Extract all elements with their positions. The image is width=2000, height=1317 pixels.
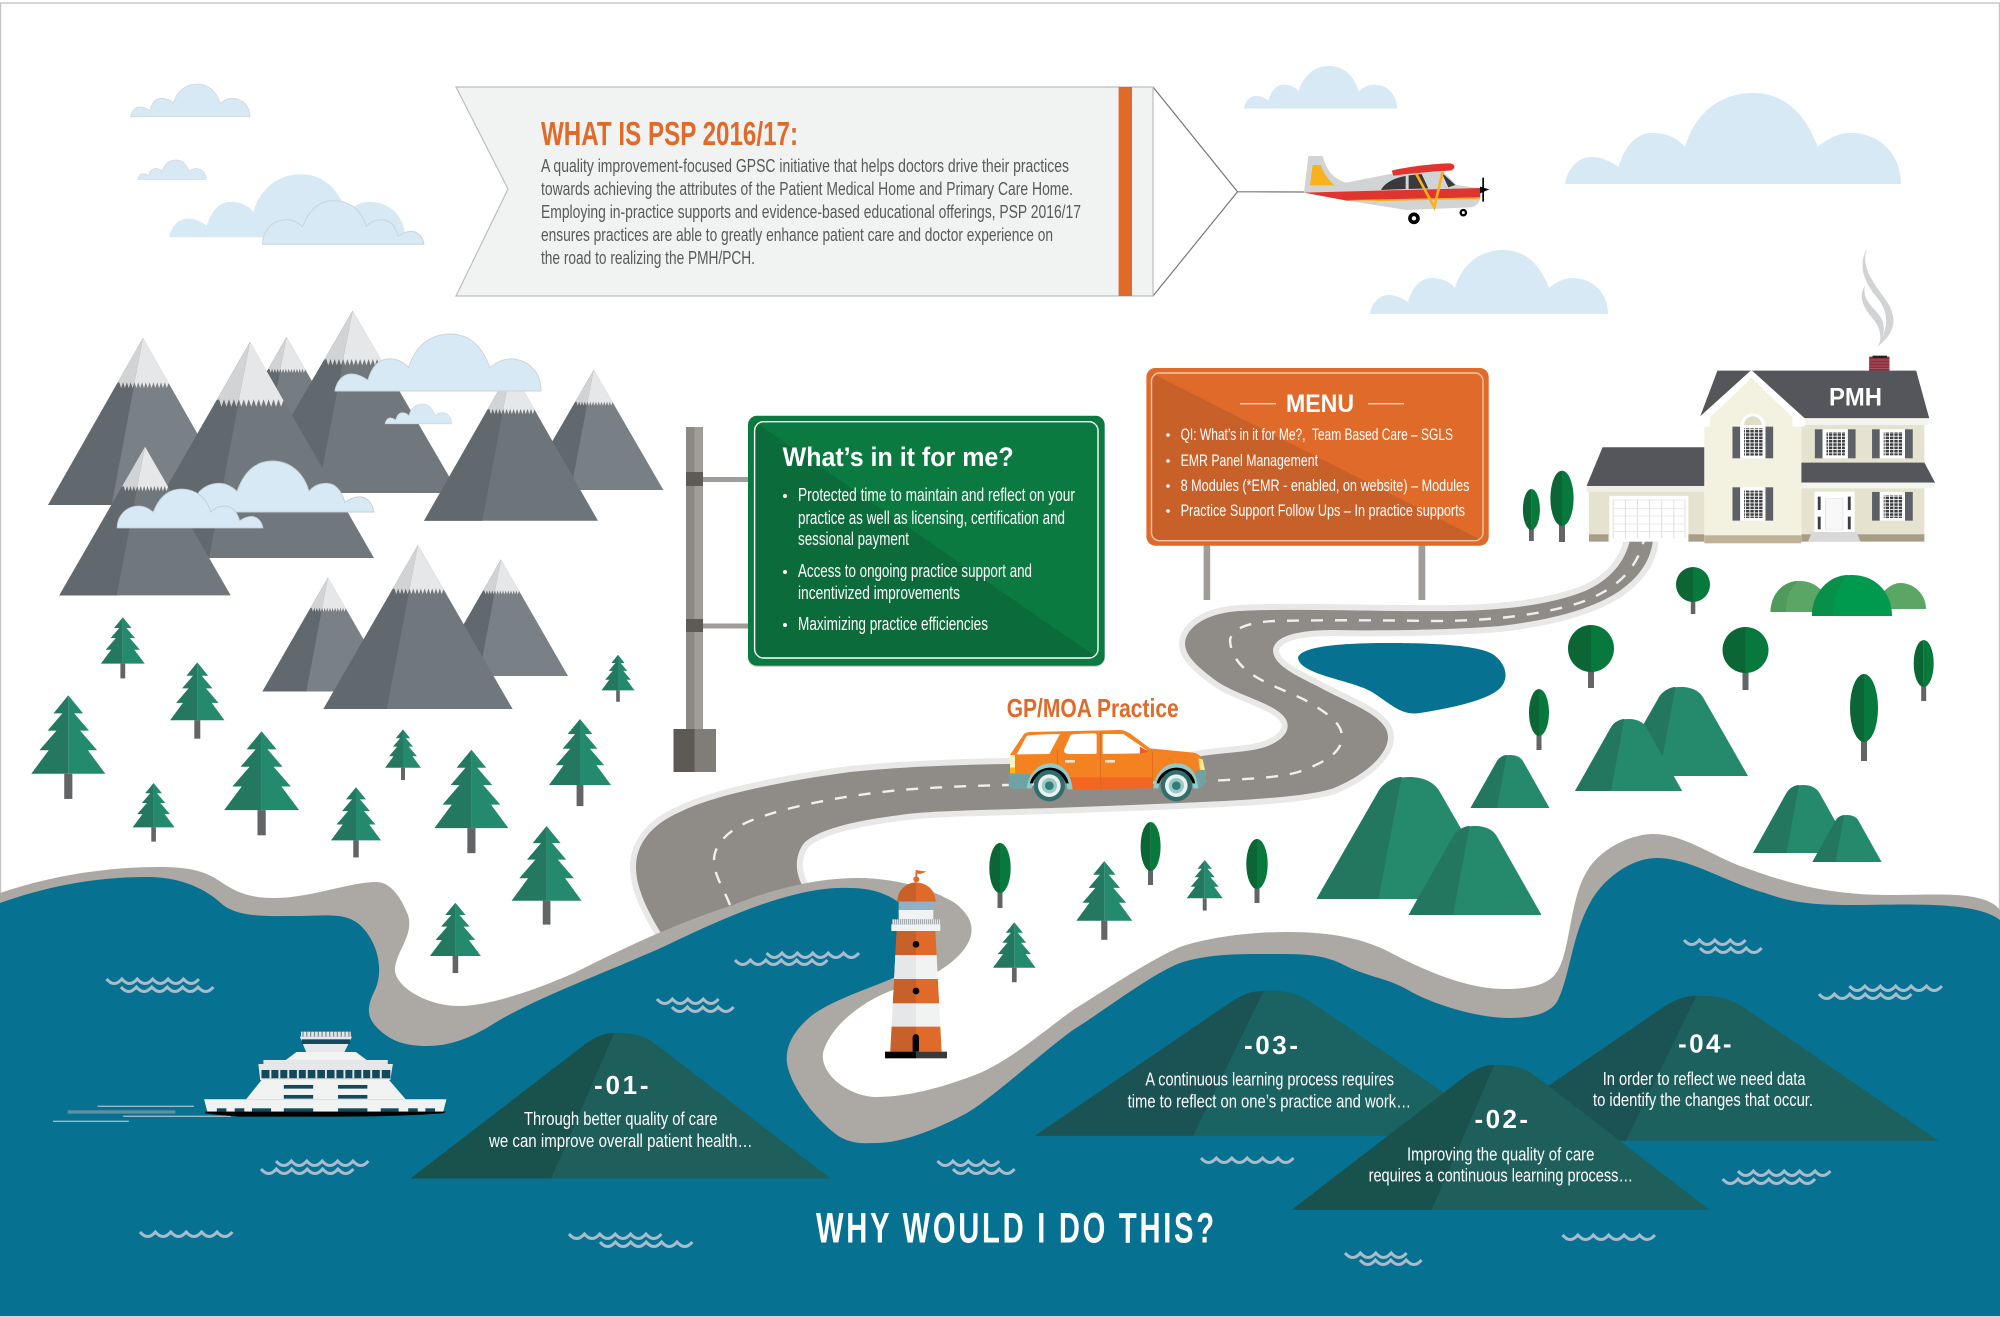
banner body text: Employing in-practice supports and evidence-based educational offerings, PSP 2016/17 — [541, 202, 1081, 222]
sign bullet list: Access to ongoing practice support and — [798, 561, 1032, 581]
icon: orange car — [1009, 730, 1206, 801]
panel: point 01 — [410, 1033, 830, 1178]
road winding to the PMH house — [636, 540, 1653, 960]
panel: point 02 — [1292, 1065, 1710, 1210]
main roof — [1699, 371, 1929, 418]
clouds over mountains — [117, 334, 541, 528]
heading: why would I do this: WHY WOULD I DO THIS? — [816, 1205, 1217, 1253]
green hills — [1316, 687, 1882, 915]
panel: what's in it for me sign — [748, 416, 1105, 667]
windows — [1732, 426, 1913, 521]
banner body text: A quality improvement-focused GPSC initiative that helps doctors drive their practices — [541, 156, 1069, 176]
shoreline sand — [0, 834, 2000, 1316]
clouds: top sky — [131, 66, 1901, 314]
sign bullet list: incentivized improvements — [798, 583, 960, 603]
banner — [456, 87, 1304, 296]
banner body text: ensures practices are able to greatly enhance patient care and doctor experience on — [541, 225, 1053, 245]
sign bullet list: sessional payment — [798, 529, 909, 549]
sea waves — [106, 940, 1942, 1264]
chimney smoke — [1862, 247, 1893, 347]
round trees — [989, 471, 1934, 908]
panel: point 03: A continuous learning process requires — [1145, 1070, 1394, 1090]
panel: point 02: requires a continuous learning process… — [1369, 1166, 1633, 1186]
menu list: 8 Modules (*EMR - enabled, on website) – Modules — [1181, 476, 1469, 495]
panel: point 01: -01- — [594, 1070, 649, 1100]
garage — [1587, 447, 1704, 542]
mountain range — [48, 311, 663, 709]
banner heading: WHAT IS PSP 2016/17: — [541, 116, 798, 153]
panel: point 04: In order to reflect we need data — [1603, 1069, 1806, 1089]
bushes — [1770, 575, 1926, 616]
menu heading: MENU — [1286, 390, 1354, 418]
chimney — [1869, 356, 1889, 371]
icon: lighthouse — [885, 870, 947, 1058]
panel: menu sign — [1146, 368, 1489, 546]
panel: point 02: -02- — [1474, 1104, 1528, 1134]
sign bullet list: Maximizing practice efficiencies — [798, 614, 988, 634]
menu list — [1166, 425, 1469, 520]
banner body text — [541, 156, 1081, 268]
lake — [1298, 643, 1506, 713]
right wing walls — [1801, 418, 1935, 542]
panel: point 01: we can improve overall patient health… — [488, 1131, 752, 1151]
panel: point 04 — [1468, 996, 1938, 1141]
front door and steps — [1808, 492, 1860, 542]
banner body text: towards achieving the attributes of the Patient Medical Home and Primary Care Home. — [541, 179, 1073, 199]
house label PMH: PMH — [1829, 384, 1882, 412]
panel: point 02: Improving the quality of care — [1407, 1145, 1594, 1165]
banner body — [456, 87, 1153, 296]
sign heading: What’s in it for me? — [783, 442, 1014, 472]
icon: ferry — [53, 1032, 446, 1121]
icon: airplane — [1304, 156, 1489, 222]
sea — [0, 858, 2000, 1316]
panel: point 03: time to reflect on one’s practice and work… — [1128, 1092, 1411, 1112]
sign bullet list: practice as well as licensing, certification and — [798, 508, 1065, 528]
banner body text: the road to realizing the PMH/PCH. — [541, 248, 755, 268]
panel: point 04: to identify the changes that occur. — [1593, 1090, 1813, 1110]
panel: point 03 — [1035, 991, 1507, 1136]
banner stripe — [1119, 87, 1132, 296]
menu list: EMR Panel Management — [1181, 451, 1318, 470]
sign bullet list: Protected time to maintain and reflect on your — [798, 485, 1075, 505]
menu list: QI: What’s in it for Me?, Team Based Care – SGLS — [1181, 425, 1453, 444]
gabled front — [1698, 370, 1805, 543]
panel: point 01: Through better quality of care — [524, 1109, 718, 1129]
menu list: Practice Support Follow Ups – In practice supports — [1181, 501, 1465, 520]
banner tow ropes — [1153, 87, 1304, 296]
ferry wake — [53, 1106, 231, 1121]
sign bullet list — [783, 485, 1075, 634]
panel: point 03: -03- — [1244, 1030, 1298, 1060]
sign posts right — [1204, 545, 1425, 600]
pine forest — [31, 617, 1223, 982]
sign post left — [674, 427, 749, 772]
label: GP/MOA Practice: GP/MOA Practice — [1007, 693, 1179, 723]
panel: point 04: -04- — [1678, 1029, 1732, 1059]
icon: PMH house — [1587, 247, 1935, 543]
